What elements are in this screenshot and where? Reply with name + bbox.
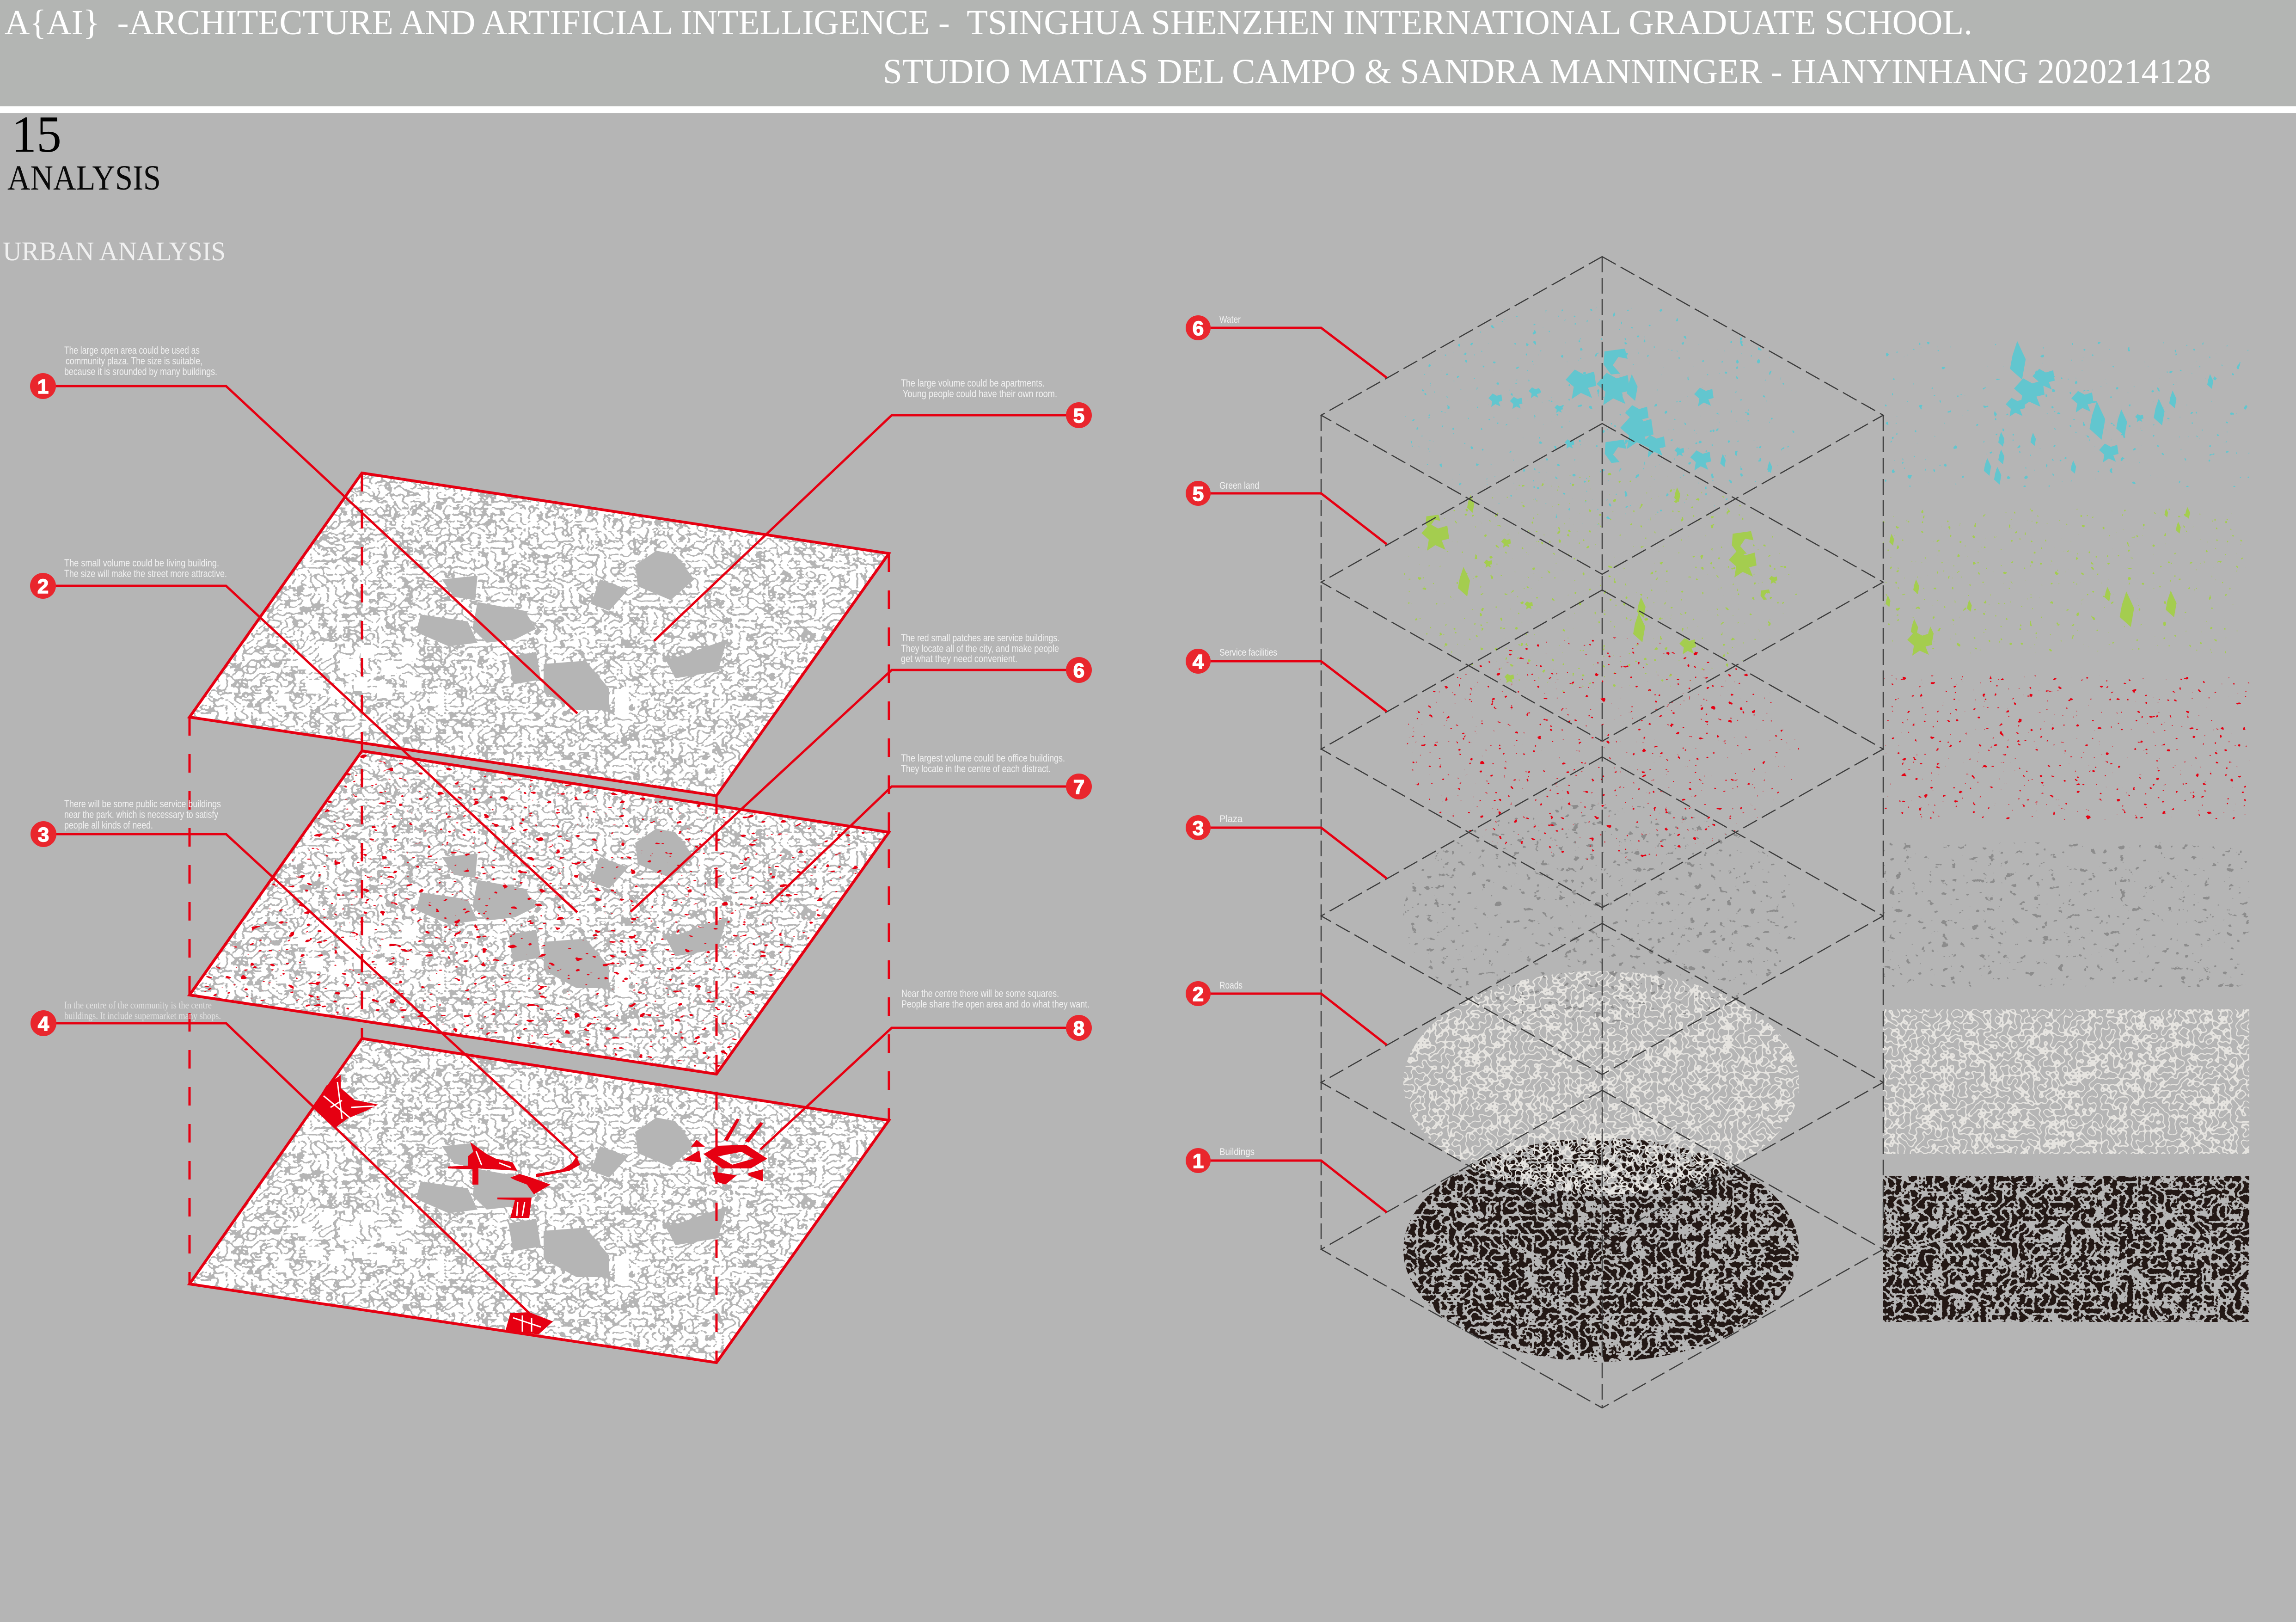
callout 5: 5 — [1073, 405, 1084, 427]
callout 7: They locate in the centre of each distract. — [901, 763, 1051, 774]
layer label 4: service facilities: 4 — [1193, 651, 1204, 673]
layer label 6: water: 6 — [1193, 317, 1204, 340]
layer: green land strip — [1883, 507, 2249, 656]
layer label 5: green land: 5 — [1193, 483, 1204, 505]
plate 2: city map with service buildings — [185, 747, 892, 1078]
layer label 3: plaza — [1186, 814, 1387, 879]
callout 4: In the centre of the community is the centre — [64, 999, 212, 1011]
callout 6: 6 — [1073, 659, 1084, 682]
layer: plaza ellipse — [1401, 801, 1803, 1031]
callout 5 — [654, 377, 1092, 641]
callout 4: buildings. It include supermarket many shops. — [64, 1010, 221, 1021]
layer: green land ellipse — [1401, 467, 1803, 697]
layer: service facilities ellipse — [1401, 634, 1803, 864]
layer: service facilities strip — [1883, 676, 2249, 820]
layer label 1: buildings — [1186, 1147, 1387, 1212]
layer: roads ellipse — [1401, 968, 1803, 1198]
plate 3: city map with central buildings — [185, 1036, 892, 1367]
layer label 2: roads — [1186, 980, 1387, 1045]
plate 1: base city map — [185, 469, 892, 800]
layer: plaza strip — [1883, 842, 2249, 987]
red central building clusters — [313, 1075, 767, 1334]
section heading: ANALYSIS — [7, 159, 161, 197]
header white divider — [0, 106, 2296, 113]
layer label 4: service facilities: Service facilities — [1219, 647, 1277, 658]
callout 3: There will be some public service buildings — [64, 798, 221, 810]
layer label 1: buildings: 1 — [1193, 1150, 1204, 1173]
header title line 2: STUDIO MATIAS DEL CAMPO & SANDRA MANNINGER - HANYINHANG 2020214128 — [883, 52, 2211, 91]
layer label 6: water — [1186, 314, 1387, 378]
callout 1: because it is srounded by many buildings. — [64, 366, 217, 377]
white block details inside red clusters — [324, 1082, 541, 1332]
callout 8: Near the centre there will be some squares. — [901, 988, 1059, 999]
dashed exploded axonometric grid — [1321, 257, 1883, 1408]
callout 6: get what they need convenient. — [901, 653, 1017, 664]
callout 4: 4 — [38, 1013, 49, 1035]
layer label 3: plaza: Plaza — [1219, 814, 1243, 824]
callout 5: Young people could have their own room. — [903, 388, 1057, 399]
layer label 5: green land — [1186, 480, 1387, 544]
layer: buildings strip — [1883, 1176, 2249, 1322]
callout 1: The large open area could be used as — [64, 344, 200, 356]
callout 6: They locate all of the city, and make people — [901, 643, 1059, 654]
layer: roads strip — [1883, 1009, 2249, 1154]
header title line 1: A{AI} -ARCHITECTURE AND ARTIFICIAL INTELLIGENCE - TSINGHUA SHENZHEN INTERNATIONAL GRADUATE SCHOOL. — [5, 3, 1972, 42]
callout 2 — [30, 557, 577, 912]
layer label 6: water: Water — [1219, 314, 1241, 325]
layer: buildings ellipse — [1401, 1135, 1803, 1364]
callout 3 — [31, 798, 578, 1158]
callout 2: The size will make the street more attractive. — [64, 568, 227, 579]
layer label 4: service facilities — [1186, 647, 1387, 712]
layer label 2: roads: 2 — [1193, 983, 1204, 1006]
callout 7 — [770, 752, 1092, 903]
page number: 15 — [12, 106, 61, 163]
layer: water ellipse — [1401, 301, 1803, 530]
callout 1: 1 — [37, 375, 49, 398]
layer label 3: plaza: 3 — [1193, 817, 1204, 840]
callout 3: people all kinds of need. — [64, 819, 153, 831]
layer: water strip — [1883, 341, 2249, 487]
callout 8: 8 — [1073, 1017, 1084, 1040]
callout 5: The large volume could be apartments. — [901, 377, 1045, 389]
callout 6 — [631, 632, 1092, 912]
callout 3: 3 — [38, 823, 49, 846]
subsection heading: URBAN ANALYSIS — [3, 236, 226, 266]
layer label 5: green land: Green land — [1219, 480, 1259, 491]
callout 2: The small volume could be living building. — [64, 557, 219, 569]
header band — [0, 0, 2296, 106]
callout 6: The red small patches are service buildings. — [901, 632, 1059, 644]
layer label 2: roads: Roads — [1219, 980, 1243, 991]
vertical dashed connectors between plates — [190, 473, 889, 1363]
callout 4 — [31, 999, 529, 1313]
callout 3: near the park, which is necessary to satisfy — [64, 809, 218, 820]
callout 8: People share the open area and do what they want. — [901, 998, 1090, 1010]
callout 8 — [760, 988, 1092, 1149]
callout 1: community plaza. The size is suitable, — [66, 355, 202, 367]
callout 1 — [30, 344, 577, 713]
callout 7: 7 — [1073, 776, 1084, 799]
layer label 1: buildings: Buildings — [1219, 1147, 1255, 1157]
callout 2: 2 — [37, 575, 49, 598]
callout 7: The largest volume could be office buildings. — [901, 752, 1065, 764]
